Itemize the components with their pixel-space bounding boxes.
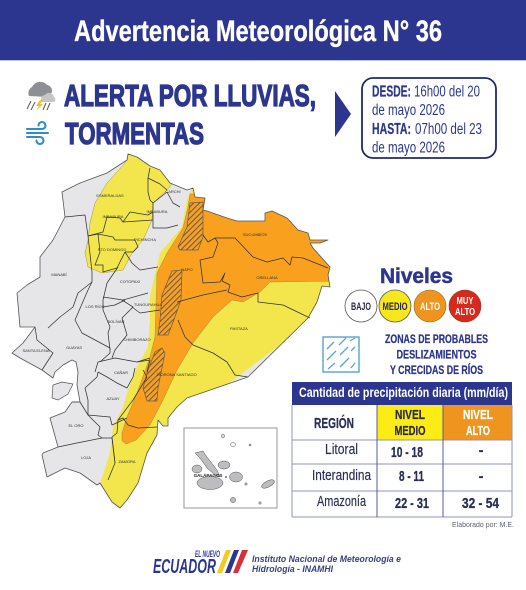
province labels: ZAMORA bbox=[118, 459, 136, 464]
date box bbox=[362, 78, 496, 158]
province labels: BOLÍVAR bbox=[107, 319, 125, 324]
table body text: - bbox=[479, 443, 484, 459]
province borders bbox=[35, 168, 328, 480]
province labels: STO DOMINGO bbox=[98, 247, 126, 252]
date box: 16h00 del 20 bbox=[414, 84, 480, 100]
province labels: TUNGURAHUA bbox=[134, 302, 162, 307]
province labels: COTOPAXI bbox=[120, 279, 140, 284]
orange zone bbox=[122, 194, 340, 444]
province labels: LOS RÍOS bbox=[86, 304, 105, 309]
icon: wind bbox=[27, 122, 48, 144]
legend: hatch icon bbox=[323, 337, 359, 372]
table body text: REGIÓN bbox=[314, 414, 354, 432]
institution name: Hidrología - INAMHI bbox=[252, 564, 333, 574]
table header bbox=[292, 382, 512, 405]
level column headers: NIVEL bbox=[395, 407, 425, 422]
heading: alert: TORMENTAS bbox=[65, 116, 204, 151]
table body text: 10 - 18 bbox=[391, 445, 423, 461]
province labels: PASTAZA bbox=[230, 326, 248, 331]
level: medio: MEDIO bbox=[382, 301, 408, 313]
map outline bbox=[12, 154, 330, 508]
institution name bbox=[252, 554, 401, 574]
province labels: ESMERALDAS bbox=[96, 193, 124, 198]
level: muy alto: MUY bbox=[456, 295, 474, 307]
legend: hatch text bbox=[385, 332, 488, 377]
hatched zones: landslides bbox=[143, 202, 203, 401]
icon: storm cloud bbox=[27, 82, 55, 111]
province labels bbox=[22, 189, 278, 464]
province labels: IMBABURA bbox=[147, 209, 168, 214]
level: muy alto: ALTO bbox=[455, 306, 475, 318]
institution name: Instituto Nacional de Meteorología e bbox=[252, 554, 401, 564]
province labels: GUAYAS bbox=[66, 345, 82, 350]
level: muy alto bbox=[449, 290, 481, 322]
level column headers: NIVEL bbox=[463, 407, 493, 422]
table body text: 22 - 31 bbox=[395, 496, 429, 512]
table body text bbox=[312, 414, 499, 512]
province labels: MANABÍ bbox=[51, 272, 68, 277]
province labels: SANTA ELENA bbox=[22, 348, 50, 353]
yellow zone: east bbox=[98, 186, 340, 515]
heading: alert: ALERTA POR LLUVIAS, bbox=[64, 78, 316, 113]
date box: DESDE: bbox=[372, 84, 411, 100]
province labels: AZUAY bbox=[106, 396, 120, 401]
table body text: Interandina bbox=[312, 468, 372, 484]
level: alto: ALTO bbox=[420, 301, 440, 313]
province labels: ORELLANA bbox=[256, 275, 278, 280]
province labels: EL ORO bbox=[69, 423, 83, 428]
level: bajo: BAJO bbox=[351, 301, 371, 313]
province labels: LOJA bbox=[81, 455, 91, 460]
level column headers bbox=[377, 405, 512, 440]
level column headers: MEDIO bbox=[394, 423, 426, 438]
date box: 07h00 del 23 bbox=[415, 121, 482, 138]
heading: levels: Niveles bbox=[380, 265, 453, 288]
province labels: CHIMBORAZO bbox=[123, 337, 151, 342]
province labels: PICHINCHA bbox=[134, 237, 156, 242]
logo: El Nuevo Ecuador: EL NUEVO bbox=[195, 549, 220, 559]
credit: Elaborado por: M.E. bbox=[452, 520, 514, 529]
province labels: CAÑAR bbox=[114, 370, 128, 375]
header band bbox=[0, 0, 526, 61]
date box: de mayo 2026 bbox=[372, 102, 445, 119]
table body text: 32 - 54 bbox=[462, 496, 499, 512]
province labels: SUCUMBÍOS bbox=[243, 232, 267, 237]
province labels: NAPO bbox=[181, 267, 193, 272]
map of Ecuador bbox=[12, 150, 340, 515]
logo: El Nuevo Ecuador: ECUADOR bbox=[153, 556, 216, 578]
legend: hatch text: DESLIZAMIENTOS bbox=[396, 348, 476, 362]
level column headers: ALTO bbox=[466, 423, 490, 438]
table body text: 8 - 11 bbox=[399, 469, 424, 485]
arrow bbox=[335, 91, 351, 137]
legend: hatch text: Y CRECIDAS DE RÍOS bbox=[390, 362, 483, 377]
province labels: IMBABURA bbox=[103, 214, 124, 219]
Puna island bbox=[52, 382, 73, 400]
legend: hatch text: ZONAS DE PROBABLES bbox=[385, 332, 488, 346]
level circles bbox=[345, 290, 481, 322]
yellow zone: north bbox=[85, 150, 175, 273]
heading: alert bbox=[64, 78, 316, 151]
table body text: Litoral bbox=[325, 442, 358, 458]
date box: HASTA: bbox=[372, 121, 411, 138]
precipitation table bbox=[292, 382, 512, 517]
inset: Galápagos bbox=[184, 428, 277, 508]
date box: de mayo 2026 bbox=[372, 140, 445, 156]
province labels: CARCHI bbox=[165, 189, 181, 194]
province labels: MORONA SANTIAGO bbox=[157, 372, 197, 377]
inset: Galápagos: GALÁPAGOS bbox=[194, 472, 222, 478]
table body text: Amazonía bbox=[317, 494, 367, 510]
table body text: - bbox=[479, 469, 484, 485]
